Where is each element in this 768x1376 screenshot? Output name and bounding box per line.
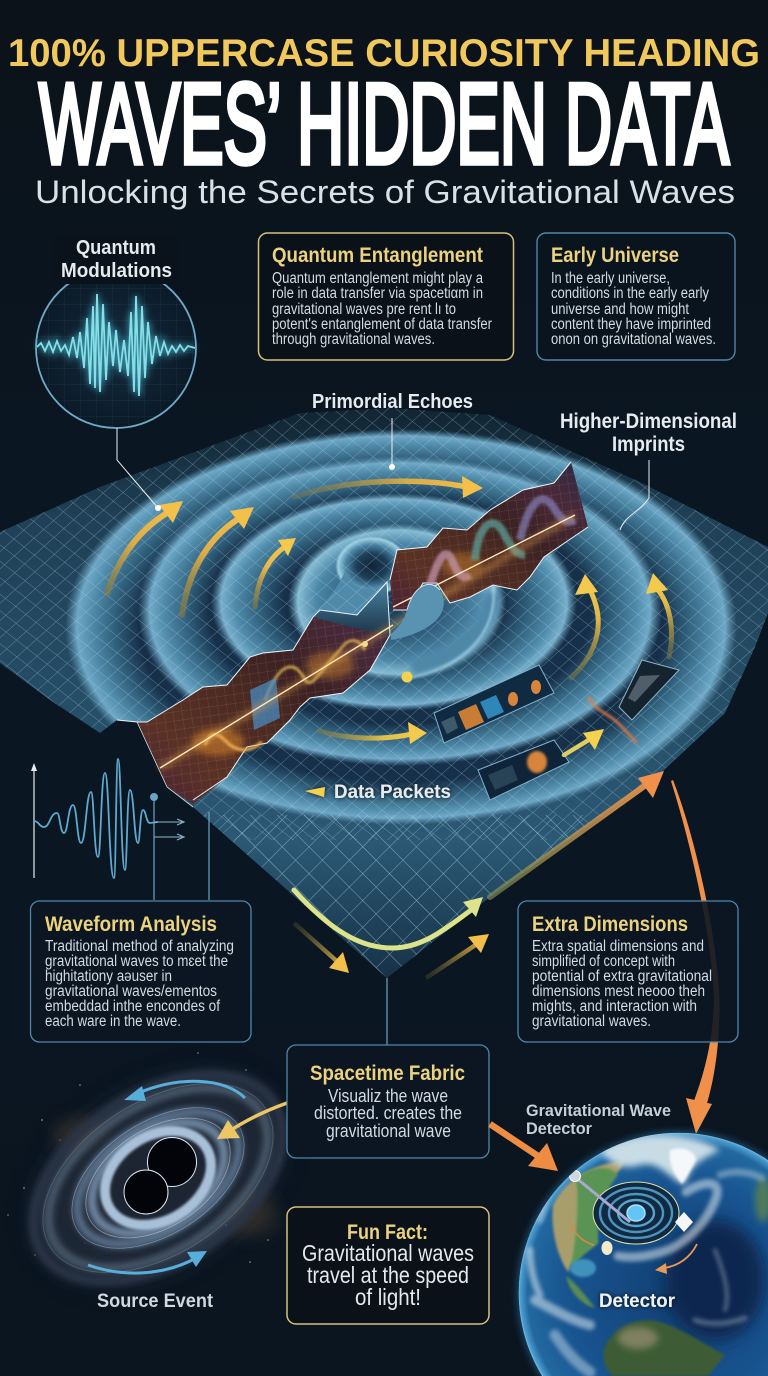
- waveform trace: [34, 759, 158, 878]
- greenland: [670, 1148, 696, 1184]
- body: [272, 270, 492, 348]
- body: gravitational waves to mɛet the: [45, 953, 228, 970]
- leader line: primordial: [391, 418, 393, 467]
- heading: Waveform Analysis: [45, 913, 217, 936]
- data card 2: [478, 740, 569, 800]
- label: gravitational wave detector: Detector: [526, 1120, 593, 1138]
- orbit arrow top: [124, 1081, 245, 1101]
- body: potent's entanglement of data transfer: [272, 316, 492, 333]
- cloud wisps: [530, 1172, 762, 1372]
- body: through gravitational waves.: [272, 331, 435, 348]
- white diamond station: [675, 1212, 693, 1232]
- arrow 1: [107, 501, 183, 593]
- body: universe and how might: [551, 301, 690, 318]
- lower arrow left: [294, 923, 349, 973]
- waveform analysis chart: [31, 759, 209, 900]
- body: [45, 938, 234, 1030]
- black hole 1: [148, 1138, 196, 1186]
- body: travel at the speed: [307, 1262, 469, 1288]
- label: higher-dimensional imprints: Higher-Dimensional: [560, 410, 737, 433]
- spacetime fabric illustration: [0, 400, 768, 990]
- body: Gravitational waves: [302, 1240, 474, 1266]
- body: Traditional method of analyzing: [45, 938, 234, 955]
- body: potential of extra gravitational: [532, 968, 712, 985]
- kicker heading: 100% UPPERCASE CURIOSITY HEADING: [8, 32, 760, 75]
- body: Visualiz the wave: [328, 1086, 448, 1106]
- panel: fun fact: [287, 1207, 489, 1324]
- label: gravitational wave detector: Gravitational Wave: [526, 1102, 671, 1120]
- deep ocean: [665, 1220, 765, 1340]
- central america: [566, 1276, 595, 1308]
- amazon tan: [618, 1327, 658, 1349]
- body: Quantum entanglement might play a: [272, 270, 483, 287]
- subtitle: Unlocking the Secrets of Gravitational Waves: [35, 174, 735, 210]
- caribbean shallows: [570, 1259, 596, 1277]
- label: higher-dimensional imprints: Imprints: [612, 433, 685, 456]
- fabric rings: [0, 400, 768, 990]
- axis: [33, 768, 35, 878]
- quantum waveform: [37, 294, 195, 396]
- body: content they have imprinted: [551, 316, 711, 333]
- green belt: [568, 1168, 618, 1276]
- label: quantum modulations: Quantum: [76, 237, 156, 259]
- arrow 6: [646, 573, 672, 657]
- heading: Early Universe: [551, 244, 679, 267]
- body: In the early universe,: [551, 270, 670, 287]
- arrow 8: [564, 729, 604, 755]
- panel: early universe: [537, 233, 735, 360]
- heading: Quantum Entanglement: [272, 244, 483, 267]
- upper-right rift lobe: [390, 462, 588, 610]
- body: [532, 938, 712, 1030]
- leader dot: primordial: [389, 464, 395, 470]
- centre dot: [402, 672, 412, 682]
- arrow 4: [294, 476, 483, 498]
- orange path to detector: [671, 780, 720, 1134]
- dust: [52, 1117, 278, 1237]
- arrow 5: [571, 574, 598, 678]
- arrow 7: [319, 722, 427, 744]
- panel: quantum entanglement: [258, 233, 514, 360]
- body: [302, 1240, 474, 1310]
- fabric curve arrow: [294, 890, 483, 948]
- panel: waveform analysis: [30, 901, 251, 1042]
- readout stem: [153, 797, 155, 900]
- north america: [552, 1160, 625, 1272]
- body: conditions in the early early: [551, 285, 709, 302]
- body: simplified of concept with: [532, 953, 675, 970]
- body: dimensions mest neooo theh: [532, 983, 705, 1000]
- source event: black hole merger: [0, 1032, 319, 1324]
- body: onon on gravitational waves.: [551, 331, 716, 348]
- connector: fabric to spacetime panel: [386, 978, 388, 1045]
- connector: [208, 812, 210, 900]
- body: distorted. creates the: [314, 1103, 462, 1123]
- arrow: spacetime to source: [217, 1103, 287, 1139]
- lower arrow right: [426, 934, 489, 978]
- body: mights, and interaction with: [532, 998, 697, 1015]
- arrow: spacetime to detector: [490, 1124, 558, 1171]
- body: highitationy aəuser in: [45, 968, 172, 985]
- label: higher-dimensional imprints: [560, 410, 737, 456]
- quantum modulations circle: [36, 268, 196, 428]
- body: Extra spatial dimensions and: [532, 938, 704, 955]
- arrow 3: [255, 538, 296, 607]
- yellow flow arrows: [107, 476, 672, 948]
- label backing: [54, 234, 178, 284]
- readout arrows: [154, 819, 184, 840]
- body: gravitational waves/ementos: [45, 983, 217, 1000]
- star field: [7, 1052, 281, 1263]
- leader dot: quantum: [155, 505, 161, 511]
- body: embeddad inthe encondes of: [45, 998, 221, 1015]
- heading: Spacetime Fabric: [310, 1062, 465, 1085]
- globe: [519, 1133, 768, 1376]
- data card 1: [434, 665, 554, 743]
- label: detector: Detector: [599, 1291, 676, 1312]
- quantum waveform glow: [37, 294, 195, 396]
- spark: [588, 697, 637, 743]
- body: gravitational wave: [326, 1121, 451, 1141]
- south america: [603, 1320, 725, 1376]
- leader line: higher-dimensional: [620, 460, 649, 530]
- body: gravitational waves pre rent lı to: [272, 301, 456, 318]
- atmosphere glow: [519, 1133, 768, 1376]
- heading: Extra Dimensions: [532, 913, 688, 936]
- heading: Fun Fact:: [347, 1221, 428, 1244]
- label: primordial echoes: Primordial Echoes: [312, 391, 473, 413]
- earth detector: [519, 1133, 768, 1376]
- rift showing embedded waveform: [117, 462, 588, 807]
- data packet cards: [434, 660, 679, 800]
- arctic ice and clouds: [600, 1135, 720, 1185]
- panel: extra dimensions: [518, 901, 738, 1042]
- lower side arrows: [294, 923, 489, 978]
- body: role in data transfer via spacetiαm in: [272, 285, 483, 302]
- energy streak: [160, 515, 575, 768]
- small orange arrow: [655, 1244, 697, 1274]
- marker: [602, 1241, 612, 1255]
- orbit arrow bottom: [88, 1251, 207, 1273]
- panel: spacetime fabric: [287, 1045, 489, 1158]
- orange arrow: [490, 771, 664, 897]
- data card 3: [619, 660, 679, 720]
- central swirl bumps: [391, 584, 494, 677]
- label: gravitational wave detector: [526, 1102, 671, 1138]
- body: gravitational waves.: [532, 1013, 651, 1030]
- black hole 2: [124, 1170, 168, 1214]
- arrow 2: [182, 507, 254, 615]
- axis arrowhead: [31, 763, 37, 771]
- europe hint: [755, 1178, 768, 1222]
- orange trail: [570, 1223, 594, 1245]
- label: source event: Source Event: [97, 1291, 214, 1312]
- lower-left rift lobe: [117, 582, 390, 807]
- detector arm: [575, 1177, 630, 1222]
- body: [551, 270, 716, 348]
- body: of light!: [355, 1284, 421, 1310]
- accretion swirls: [0, 1032, 319, 1324]
- label: quantum modulations: [61, 237, 172, 282]
- label: quantum modulations: Modulations: [61, 260, 172, 282]
- readout dot: [150, 793, 158, 801]
- label: data packets: Data Packets: [334, 782, 451, 803]
- leader line: quantum: [117, 428, 158, 508]
- detector ripple rings: [593, 1182, 679, 1244]
- end station: [570, 1170, 580, 1182]
- title block: [8, 32, 760, 210]
- arrowhead: [686, 1098, 712, 1134]
- body: each ware in the wave.: [45, 1013, 181, 1030]
- body: [314, 1086, 462, 1141]
- nebula glow: [0, 1033, 318, 1323]
